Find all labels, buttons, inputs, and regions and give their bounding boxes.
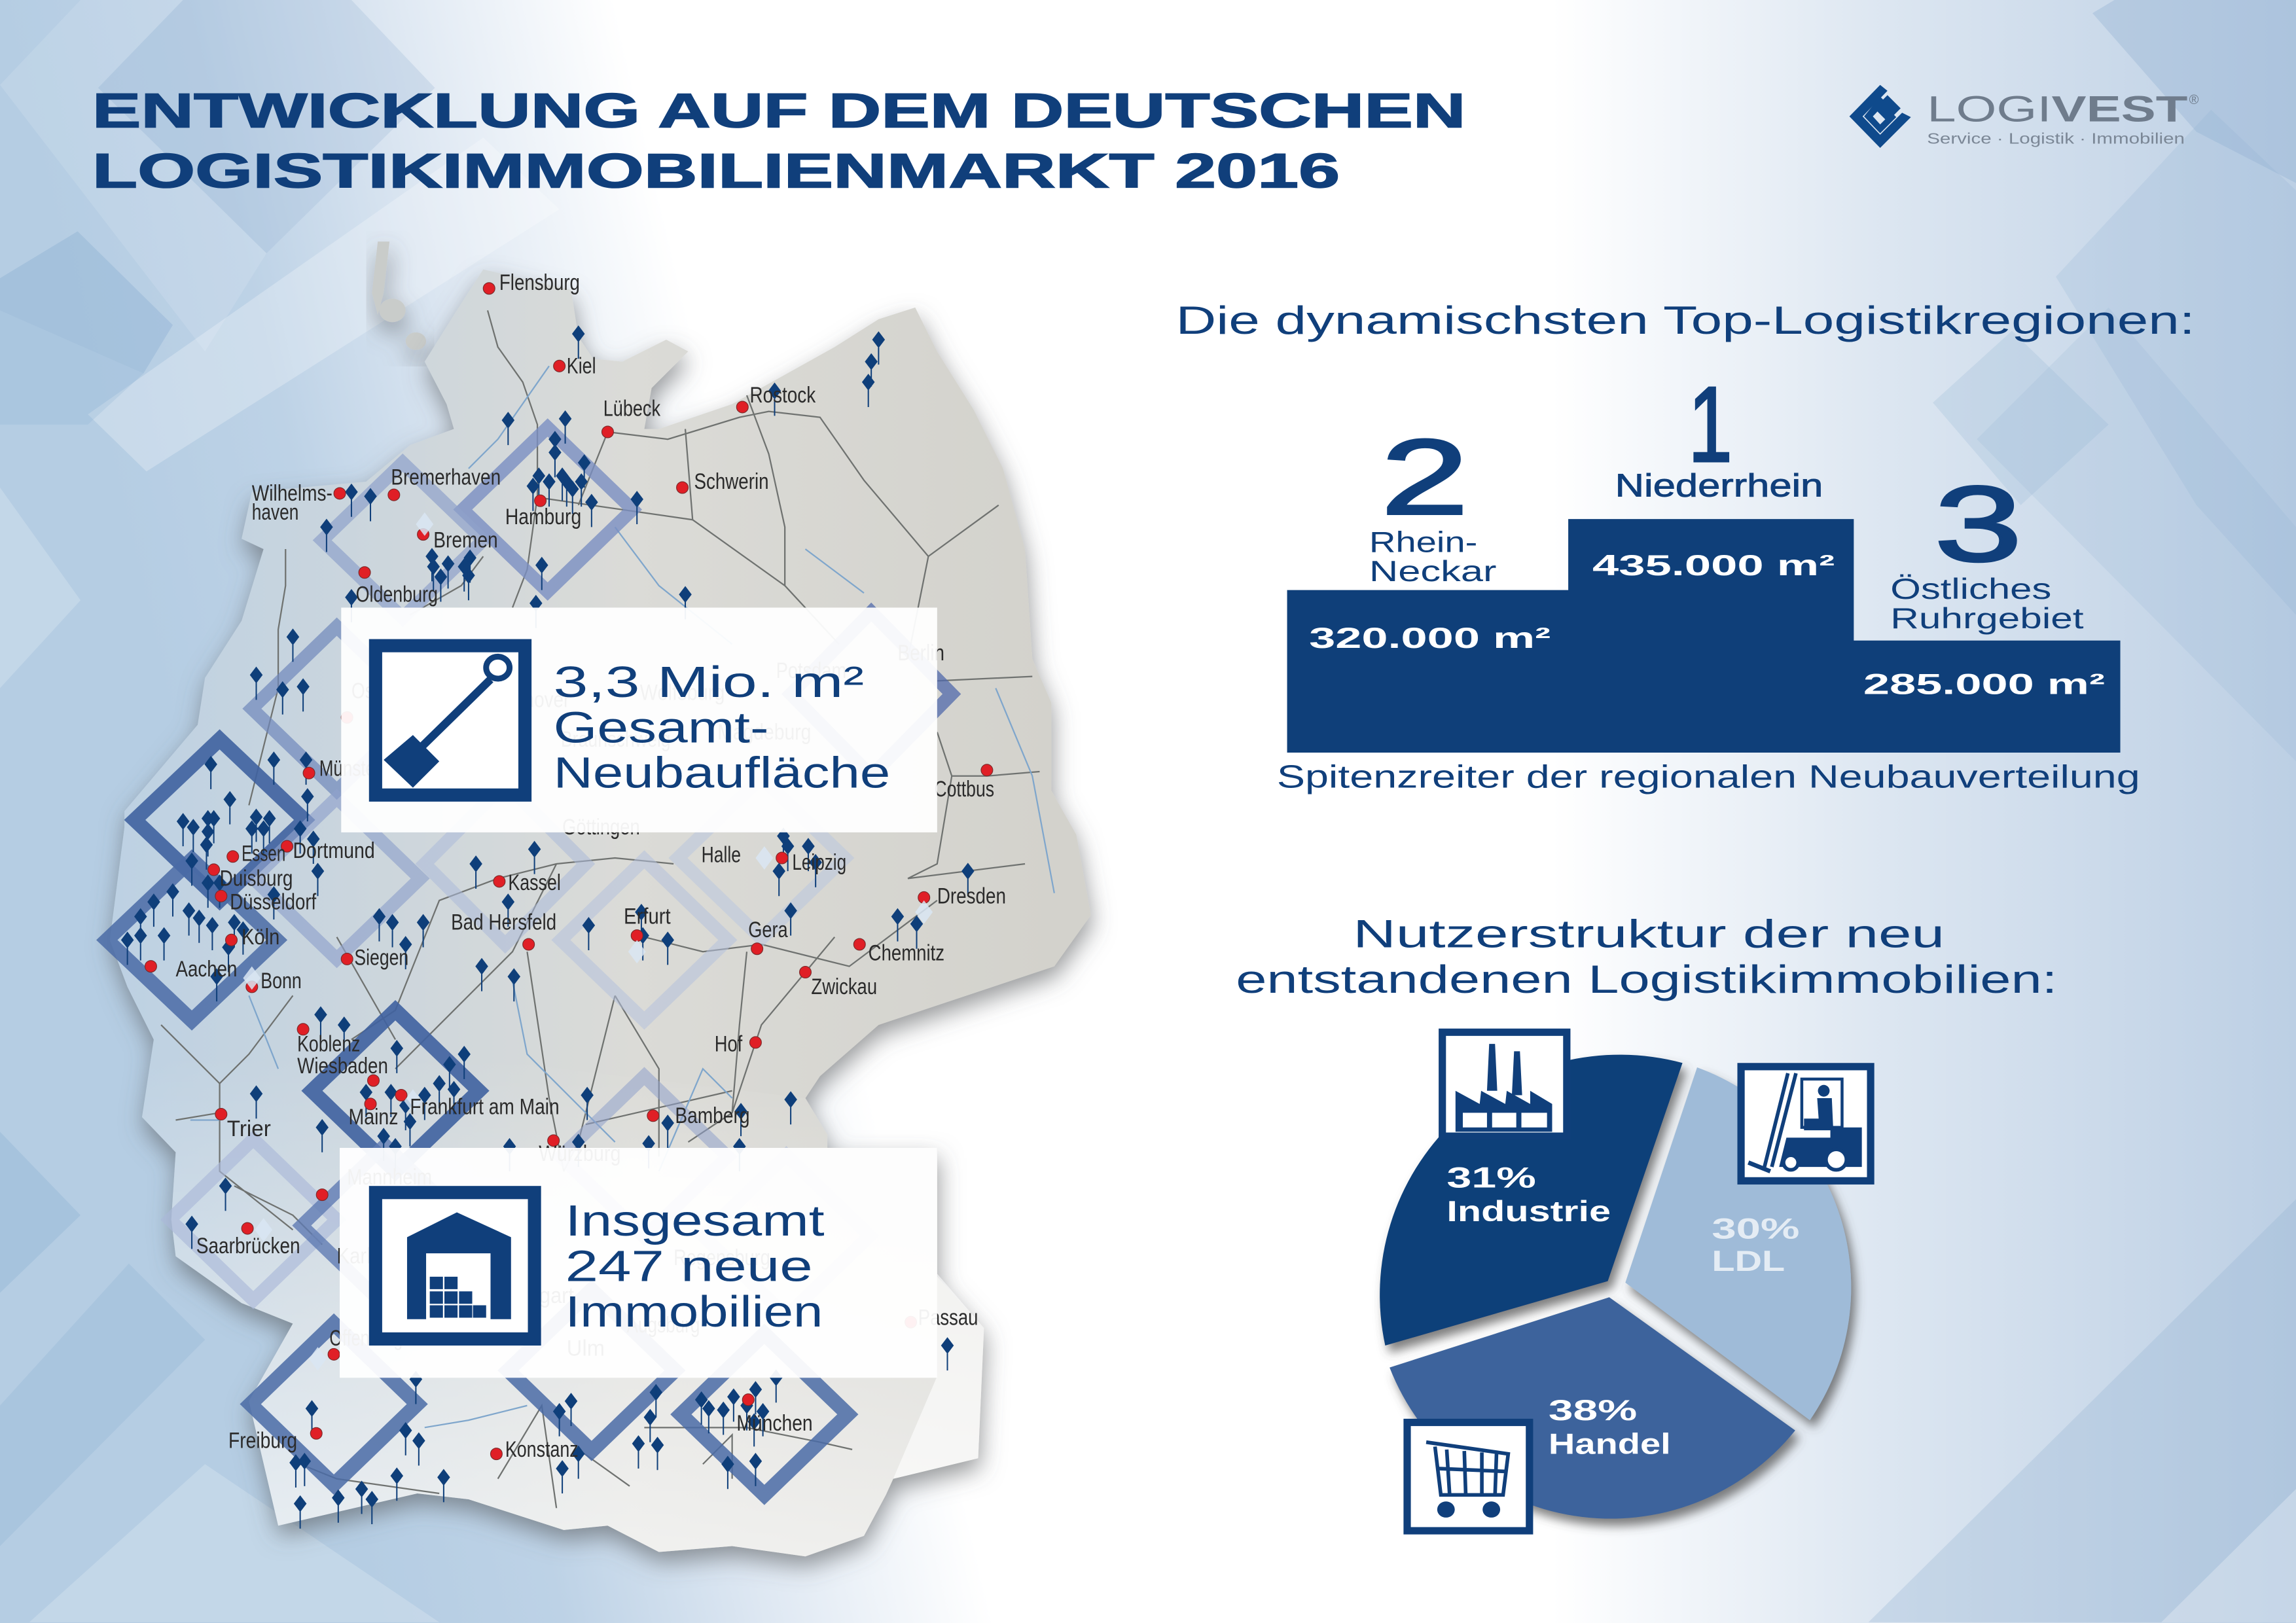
rank 3: Oestliches Ruhrgebiet: Östliches — [1890, 573, 2051, 605]
label: Industrie: 31% — [1446, 1161, 1536, 1194]
label: LDL: LDL — [1712, 1245, 1785, 1277]
label: Industrie — [1446, 1161, 1611, 1228]
city labels: Köln — [242, 925, 279, 950]
city labels: Stuttgart — [498, 1283, 574, 1308]
city labels: Duisburg — [220, 866, 293, 891]
city labels: Mainz — [348, 1105, 399, 1130]
city labels: Schwerin — [694, 469, 769, 494]
slice: LDL — [1625, 1067, 1851, 1420]
rank 3: Oestliches Ruhrgebiet: Ruhrgebiet — [1890, 602, 2084, 635]
city labels: Essen — [242, 842, 285, 866]
city labels: Kassel — [508, 870, 561, 895]
logo: Logivest — [1850, 85, 2199, 148]
callout panel — [340, 1148, 937, 1378]
heading: user structure — [1236, 912, 2057, 1001]
city labels: München — [736, 1411, 813, 1436]
city labels: Berlin — [897, 641, 944, 666]
city labels: Dresden — [937, 883, 1006, 908]
city labels: Bremen — [433, 528, 498, 553]
roads and rivers — [161, 310, 1054, 1508]
heading: user structure: entstandenen Logistikimmobilien: — [1236, 957, 2057, 1001]
city labels: Zwickau — [811, 974, 877, 999]
icon: forklift — [1741, 1067, 1871, 1181]
city labels: Saarbrücken — [196, 1234, 300, 1258]
city labels: Cottbus — [934, 777, 994, 802]
callout text: Immobilien — [565, 1287, 823, 1336]
icon: factory — [1443, 1032, 1567, 1136]
city labels: Bonn — [260, 969, 302, 993]
rank 2: Rhein-Neckar: Neckar — [1369, 555, 1497, 588]
callout: new properties — [340, 1148, 937, 1378]
rank 3: Oestliches Ruhrgebiet — [1863, 464, 2105, 700]
callout panel — [341, 607, 937, 832]
city labels: Wiesbaden — [297, 1054, 388, 1079]
city labels: Flensburg — [499, 270, 580, 295]
map land shape — [110, 270, 1091, 1556]
callout text — [554, 658, 890, 798]
city labels: Ulm — [567, 1336, 605, 1361]
city labels: Trier — [227, 1116, 271, 1141]
city labels: Offenburg — [329, 1326, 403, 1351]
city labels: Osnabrück — [351, 679, 437, 704]
city labels: Bad Hersfeld — [451, 910, 556, 935]
city labels: Regensburg — [673, 1245, 770, 1270]
callout text: Insgesamt — [565, 1196, 825, 1245]
city labels: Halle — [702, 843, 741, 868]
city labels: Koblenz — [297, 1031, 360, 1056]
title — [92, 84, 1465, 198]
city labels: Passau — [918, 1306, 978, 1330]
slice: Handel — [1390, 1297, 1795, 1519]
label: Handel: 38% — [1549, 1394, 1637, 1427]
podium caption: Spitenzreiter der regionalen Neubauverteilung — [1277, 759, 2140, 795]
label: Handel — [1549, 1394, 1671, 1461]
logo mark — [1850, 85, 1911, 148]
callout text: Neubaufläche — [554, 749, 890, 798]
city labels: Göttingen — [562, 815, 640, 840]
title: LOGISTIKIMMOBILIENMARKT 2016 — [92, 143, 1340, 198]
icon: shovel — [376, 646, 525, 795]
city labels: Karlsruhe — [337, 1244, 419, 1269]
city labels: Dortmund — [293, 838, 375, 863]
city labels: Freiburg — [228, 1429, 297, 1454]
city labels: Konstanz — [505, 1437, 579, 1462]
city labels: Hamburg — [505, 505, 581, 529]
rank 1: Niederrhein: 435.000 m² — [1592, 549, 1835, 582]
city labels — [175, 270, 1006, 1462]
rank 2: Rhein-Neckar — [1309, 417, 1551, 654]
rank 3: Oestliches Ruhrgebiet: 3 — [1934, 464, 2022, 584]
label: Industrie: Industrie — [1446, 1195, 1611, 1228]
city dots — [145, 283, 993, 1460]
city labels: Bielefeld — [410, 751, 480, 776]
map of Germany — [107, 241, 1091, 1556]
location pins — [122, 327, 973, 1529]
city labels: Erfurt — [624, 904, 671, 929]
city labels: Würzburg — [539, 1141, 621, 1166]
airport markers — [243, 512, 933, 1370]
city labels: Mannheim — [347, 1165, 432, 1190]
callout text — [565, 1196, 825, 1336]
callout: total new floor space — [341, 607, 937, 832]
city labels: Bamberg — [675, 1103, 749, 1128]
city labels: Aachen — [175, 957, 237, 982]
highlighted region diamonds — [107, 427, 952, 1495]
city labels: Siegen — [354, 945, 408, 970]
city labels: Augsburg — [627, 1313, 700, 1338]
icon: shopping cart — [1407, 1422, 1530, 1531]
city labels: Wilhelms- — [252, 481, 332, 506]
city labels: haven — [252, 500, 298, 525]
city labels: Lübeck — [603, 396, 661, 421]
podium blocks — [1287, 519, 2121, 753]
logo tagline: Service · Logistik · Immobilien — [1927, 130, 2185, 147]
title: ENTWICKLUNG AUF DEM DEUTSCHEN — [92, 84, 1465, 138]
city labels: Potsdam — [776, 658, 846, 683]
logo wordmark: LOGI VEST — [1927, 88, 2187, 130]
rank 1: Niederrhein: 1 — [1689, 365, 1732, 484]
registered mark: ® — [2189, 93, 2199, 107]
rank 1: Niederrhein — [1592, 365, 1835, 582]
pie chart — [1380, 1032, 1871, 1531]
city labels: Leipzig — [792, 850, 846, 875]
icon: warehouse — [376, 1192, 535, 1339]
podium chart — [1287, 365, 2121, 753]
label: LDL — [1712, 1213, 1800, 1277]
city labels: Wolfsburg — [640, 680, 725, 705]
city labels: Düsseldorf — [230, 889, 317, 914]
heading: user structure: Nutzerstruktur der neu — [1353, 912, 1945, 956]
city labels: Oldenburg — [356, 582, 438, 607]
slice: Industrie — [1380, 1055, 1683, 1346]
North Sea islands — [372, 241, 426, 350]
city labels: Gera — [748, 918, 788, 942]
city labels: Bremerhaven — [391, 465, 501, 490]
city labels: Braunschweig — [561, 727, 671, 752]
city labels: Kiel — [567, 354, 596, 379]
city labels: Münster — [319, 757, 381, 781]
rank 2: Rhein-Neckar: 2 — [1381, 417, 1469, 537]
rank 3: Oestliches Ruhrgebiet: 285.000 m² — [1863, 668, 2105, 700]
callout text: 3,3 Mio. m² — [554, 658, 864, 707]
heading: top logistics regions: Die dynamischsten Top-Logistikregionen: — [1176, 298, 2195, 342]
city labels: Frankfurt am Main — [410, 1095, 560, 1120]
rank 1: Niederrhein: Niederrhein — [1615, 467, 1823, 503]
callout text: Gesamt- — [554, 703, 769, 752]
rank 2: Rhein-Neckar: 320.000 m² — [1309, 622, 1551, 654]
city labels: Hannover — [490, 688, 569, 713]
city labels: Magdeburg — [717, 720, 811, 745]
callout text: 247 neue — [565, 1242, 813, 1291]
city labels: Hof — [715, 1031, 743, 1056]
label: Handel: Handel — [1549, 1428, 1671, 1461]
label: LDL: 30% — [1712, 1213, 1800, 1245]
city labels: Rostock — [749, 383, 816, 408]
city labels: Chemnitz — [869, 941, 944, 966]
rank 2: Rhein-Neckar: Rhein- — [1369, 526, 1477, 558]
